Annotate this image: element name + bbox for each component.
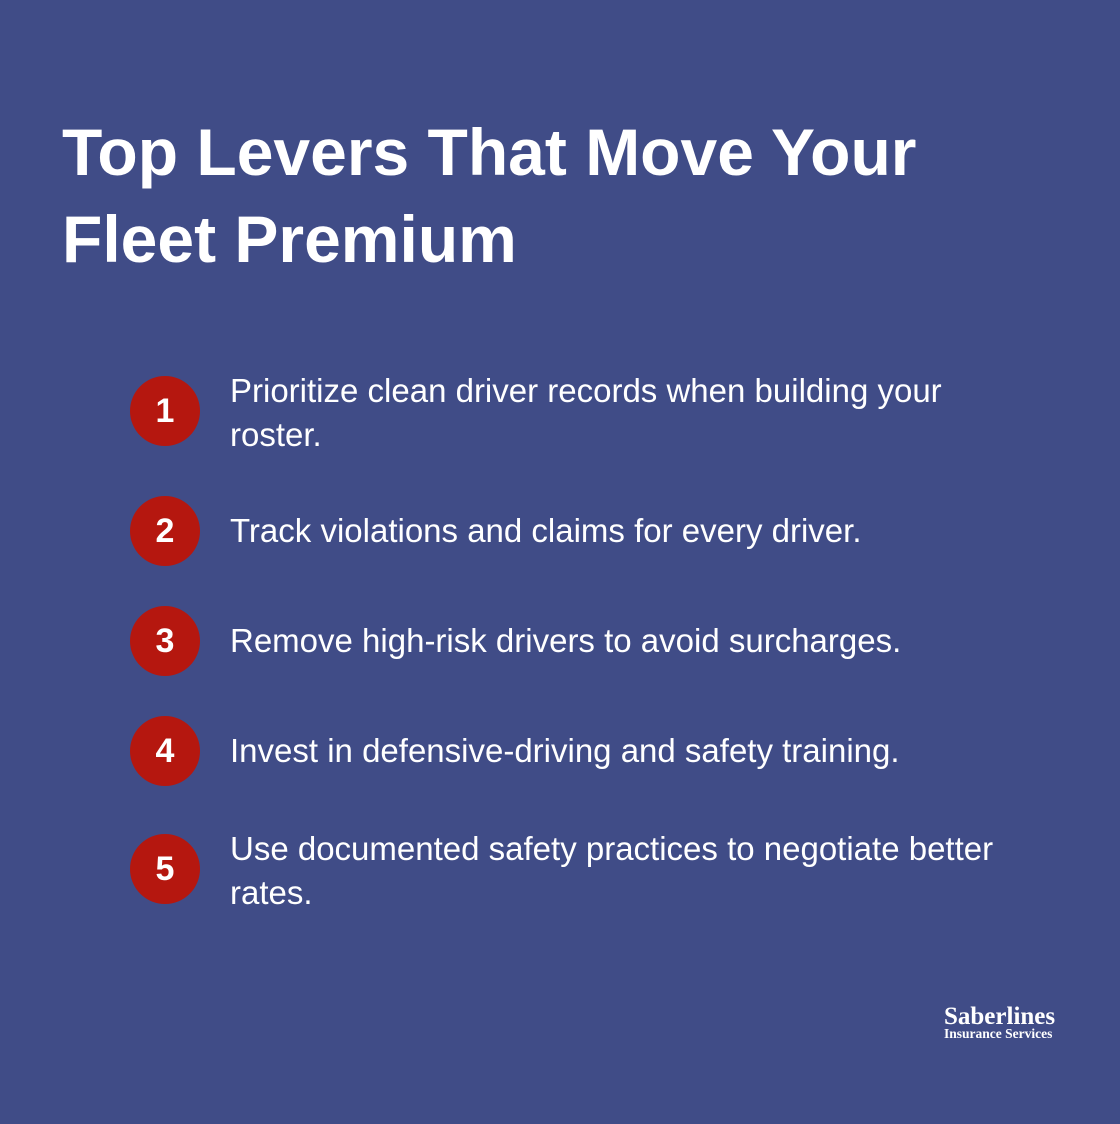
text 5: Use documented safety practices to negotiate better rates. <box>230 830 993 911</box>
logo: Insurance Services <box>944 1026 1052 1041</box>
badge 5 <box>130 834 200 904</box>
title: Top Levers That Move Your <box>62 115 916 189</box>
item 1 <box>130 372 942 453</box>
badge 1 <box>130 376 200 446</box>
item 5 <box>130 830 993 911</box>
item 4 <box>130 716 900 786</box>
badge 1: 1 <box>156 392 174 430</box>
logo: Saberlines <box>944 1003 1055 1030</box>
badge 3 <box>130 606 200 676</box>
badge 5: 5 <box>156 850 174 888</box>
badge 4 <box>130 716 200 786</box>
badge 2: 2 <box>156 512 174 550</box>
badge 2 <box>130 496 200 566</box>
text 1: Prioritize clean driver records when building your roster. <box>230 372 942 453</box>
title: Fleet Premium <box>62 202 517 276</box>
text 2: Track violations and claims for every driver. <box>230 512 862 549</box>
text 4: Invest in defensive-driving and safety training. <box>230 732 900 769</box>
text 3: Remove high-risk drivers to avoid surcharges. <box>230 622 901 659</box>
badge 3: 3 <box>156 622 174 660</box>
badge 4: 4 <box>156 732 174 770</box>
item 3 <box>130 606 901 676</box>
title <box>62 115 916 276</box>
item 2 <box>130 496 862 566</box>
